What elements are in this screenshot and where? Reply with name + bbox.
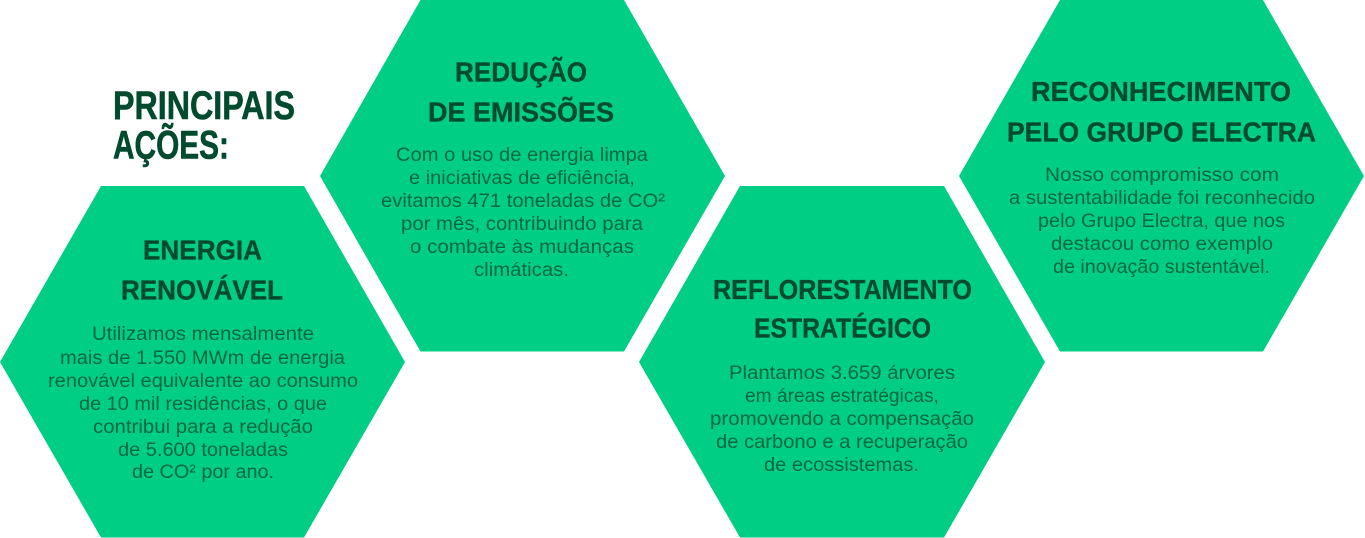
title: principais ações: AÇÕES: — [113, 122, 229, 168]
text block: reflorestamento description: de ecossistemas. — [764, 454, 919, 476]
text block: reflorestamento description: promovendo a compensação — [710, 408, 974, 430]
heading: reflorestamento estratégico — [713, 274, 972, 344]
text block: redução de emissões description: o combate às mudanças — [410, 236, 634, 258]
text block: reflorestamento description: Plantamos 3.659 árvores — [729, 362, 955, 384]
text block: reflorestamento description: de carbono e a recuperação — [716, 431, 968, 453]
text block: reconhecimento description — [1009, 164, 1315, 278]
panel: reconhecimento pelo grupo electra — [959, 0, 1364, 352]
text block: energia renovável description: de 10 mil residências, o que — [79, 393, 327, 415]
text block: energia renovável description: Utilizamos mensalmente — [92, 323, 314, 345]
text block: energia renovável description: mais de 1.550 MWm de energia — [60, 347, 345, 369]
heading: energia renovável: ENERGIA — [143, 235, 262, 266]
text block: redução de emissões description: e iniciativas de eficiência, — [409, 167, 635, 189]
text block: reconhecimento description: Nosso compromisso com — [1045, 164, 1279, 186]
heading: reflorestamento estratégico: REFLORESTAMENTO — [713, 274, 972, 305]
text block: energia renovável description: contribui para a redução — [93, 416, 313, 438]
heading: reconhecimento pelo grupo electra: PELO GRUPO ELECTRA — [1007, 117, 1316, 148]
text block: redução de emissões description: Com o uso de energia limpa — [396, 144, 648, 166]
text block: redução de emissões description — [381, 144, 666, 281]
text block: energia renovável description: de 5.600 toneladas — [118, 439, 288, 461]
text block: redução de emissões description: por mês, contribuindo para — [401, 213, 643, 235]
heading: redução de emissões — [428, 57, 614, 127]
title: principais ações: PRINCIPAIS — [113, 84, 295, 128]
text block: reflorestamento description — [710, 362, 974, 476]
panel: energia renovável — [0, 186, 405, 538]
text block: energia renovável description — [48, 323, 358, 483]
text block: redução de emissões description: evitamos 471 toneladas de CO² — [381, 190, 666, 212]
text block: reconhecimento description: a sustentabilidade foi reconhecido — [1009, 187, 1315, 209]
text block: reconhecimento description: de inovação sustentável. — [1053, 256, 1270, 278]
heading: energia renovável: RENOVÁVEL — [121, 275, 283, 306]
text block: reconhecimento description: destacou como exemplo — [1051, 233, 1273, 255]
heading: redução de emissões: DE EMISSÕES — [428, 96, 614, 127]
heading: redução de emissões: REDUÇÃO — [455, 57, 587, 88]
title: principais ações — [113, 84, 295, 168]
text block: reconhecimento description: pelo Grupo Electra, que nos — [1038, 210, 1285, 232]
text block: redução de emissões description: climáticas. — [474, 259, 569, 281]
text block: reflorestamento description: em áreas estratégicas, — [745, 385, 939, 407]
heading: reconhecimento pelo grupo electra — [1007, 76, 1316, 148]
panel: redução de emissões — [320, 0, 725, 352]
heading: reflorestamento estratégico: ESTRATÉGICO — [754, 313, 931, 344]
heading: energia renovável — [121, 235, 283, 306]
panel: reflorestamento estratégico — [639, 186, 1045, 538]
heading: reconhecimento pelo grupo electra: RECONHECIMENTO — [1031, 76, 1291, 107]
text block: energia renovável description: de CO² por ano. — [132, 461, 274, 483]
text block: energia renovável description: renovável equivalente ao consumo — [48, 370, 358, 392]
